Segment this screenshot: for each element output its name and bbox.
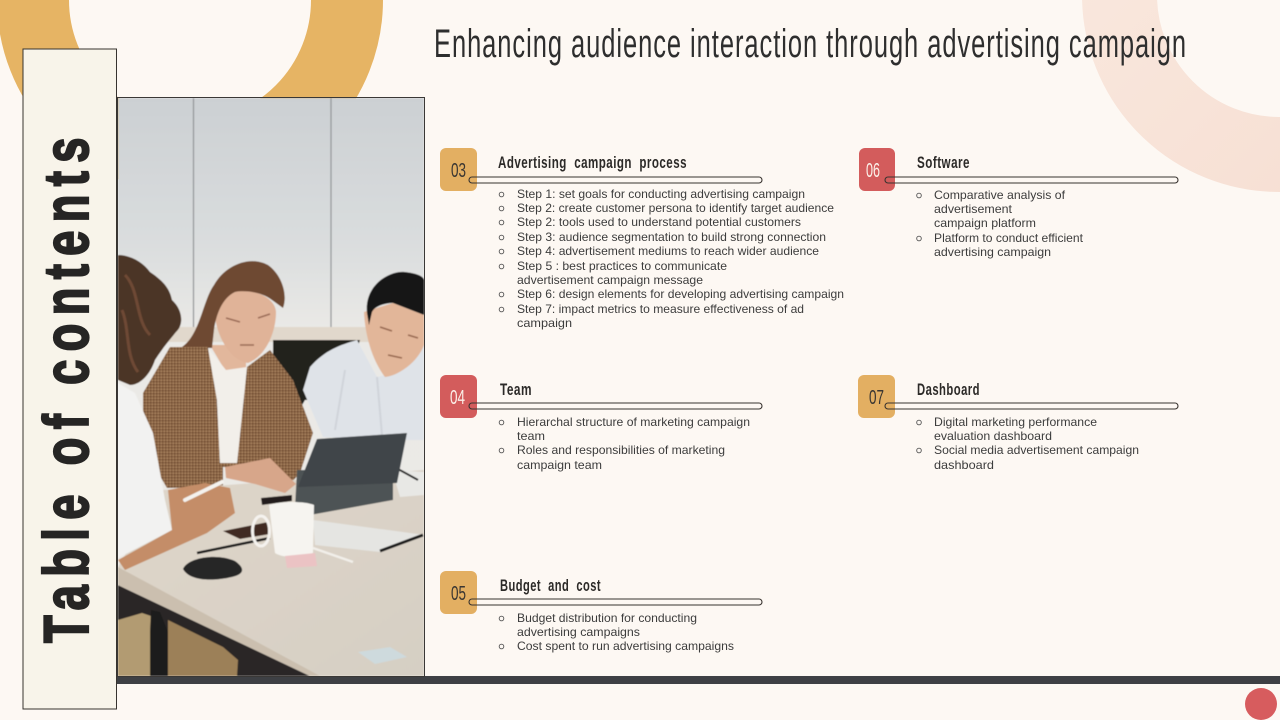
- bullet list 05: Budget distribution for conducting: [517, 611, 697, 625]
- bullet list 03: Step 2: tools used to understand potential customers: [517, 215, 801, 229]
- desk: [118, 470, 424, 676]
- bullet list 03: Step 6: design elements for developing advertising campaign: [517, 287, 844, 301]
- tablet stand and screen: [295, 470, 393, 515]
- badge 07: [858, 375, 895, 418]
- bullet list 06: [917, 188, 1084, 259]
- woman hand: [225, 458, 296, 493]
- bullet list 04: [499, 415, 750, 472]
- white cup: [252, 516, 270, 546]
- blue sticky note: [358, 647, 407, 664]
- bullet list 06: Comparative analysis of: [934, 188, 1066, 202]
- right-side papers behind tablet: [396, 471, 424, 498]
- bullet list 05: [499, 611, 734, 653]
- badge 06: 06: [866, 160, 880, 182]
- panel: section 03 advertising campaign process: [440, 148, 844, 330]
- panel: section 06 software: [859, 148, 1178, 259]
- woman face: [215, 290, 276, 363]
- panel: section 07 dashboard: [858, 375, 1178, 472]
- decorative gold ring: [33, 0, 347, 157]
- heading 04: Team: [500, 380, 532, 399]
- man face: [364, 303, 424, 377]
- red page marker circle: [1245, 688, 1277, 720]
- woman jacket: [143, 347, 313, 488]
- left person shirt: [118, 383, 172, 558]
- badge 03: 03: [451, 160, 466, 182]
- legs and chair: [118, 612, 152, 676]
- badge 05: 05: [451, 583, 466, 605]
- papers and clipboard: [313, 520, 424, 552]
- woman hair: [182, 261, 285, 348]
- bullet list 06: campaign platform: [934, 216, 1036, 230]
- heading 05: Budget and cost: [500, 576, 601, 595]
- badge 05: [440, 571, 477, 614]
- badge 07: 07: [869, 387, 884, 409]
- woman neck: [210, 345, 246, 373]
- bullet list 05: Cost spent to run advertising campaigns: [517, 639, 734, 653]
- bullet list 04: Hierarchal structure of marketing campaign: [517, 415, 750, 429]
- bullet list 04: team: [517, 429, 545, 443]
- man hair: [367, 272, 424, 325]
- bullet list 04: Roles and responsibilities of marketing: [517, 443, 725, 457]
- bullet list 03: Step 5 : best practices to communicate: [517, 259, 727, 273]
- left person arm and hands: [118, 483, 235, 570]
- man shirt: [303, 340, 424, 440]
- bullet list 07: dashboard: [934, 458, 994, 472]
- badge 06: [859, 148, 895, 191]
- phone and pen: [223, 522, 270, 539]
- bullet list 03: Step 3: audience segmentation to build strong connection: [517, 230, 826, 244]
- bullet list 03: Step 2: create customer persona to identify target audience: [517, 201, 834, 215]
- sticky note and pen: [285, 553, 317, 568]
- panel: vertical table of contents: [23, 49, 116, 709]
- bottom bar: [117, 676, 1280, 684]
- bullet list 03: advertisement campaign message: [517, 273, 703, 287]
- panel: section 05 budget and cost: [440, 571, 762, 653]
- left person hair: [118, 255, 181, 385]
- heading 06: Software: [917, 153, 970, 172]
- bullet list 06: advertisement: [934, 202, 1013, 216]
- badge 04: 04: [450, 387, 465, 409]
- heading: Table of contents: Table of contents: [31, 138, 102, 643]
- bullet list 07: Social media advertisement campaign: [934, 443, 1139, 457]
- heading 07: Dashboard: [917, 380, 980, 399]
- bullet list 06: Platform to conduct efficient: [934, 231, 1084, 245]
- woman undershirt: [208, 348, 247, 463]
- bullet list 03: Step 1: set goals for conducting advertising campaign: [517, 187, 805, 201]
- bullet list 04: campaign team: [517, 458, 602, 472]
- panel: section 04 team: [440, 375, 762, 472]
- bullet list 05: advertising campaigns: [517, 625, 640, 639]
- heading 03: Advertising campaign process: [498, 153, 687, 172]
- bullet list 06: advertising campaign: [934, 245, 1051, 259]
- bullet list 03: [499, 187, 844, 330]
- bullet list 03: Step 4: advertisement mediums to reach wider audience: [517, 244, 819, 258]
- badge 03: [440, 148, 477, 191]
- bullet list 07: evaluation dashboard: [934, 429, 1052, 443]
- badge 04: [440, 375, 477, 418]
- decorative pink ring: [1120, 0, 1280, 154]
- white stylus: [185, 482, 222, 500]
- bullet list 07: [917, 415, 1139, 472]
- photo: team around a table with a tablet: [118, 98, 424, 676]
- bullet list 03: campaign: [517, 316, 572, 330]
- black mouse: [183, 557, 242, 580]
- bullet list 07: Digital marketing performance: [934, 415, 1097, 429]
- bullet list 03: Step 7: impact metrics to measure effectiveness of ad: [517, 302, 804, 316]
